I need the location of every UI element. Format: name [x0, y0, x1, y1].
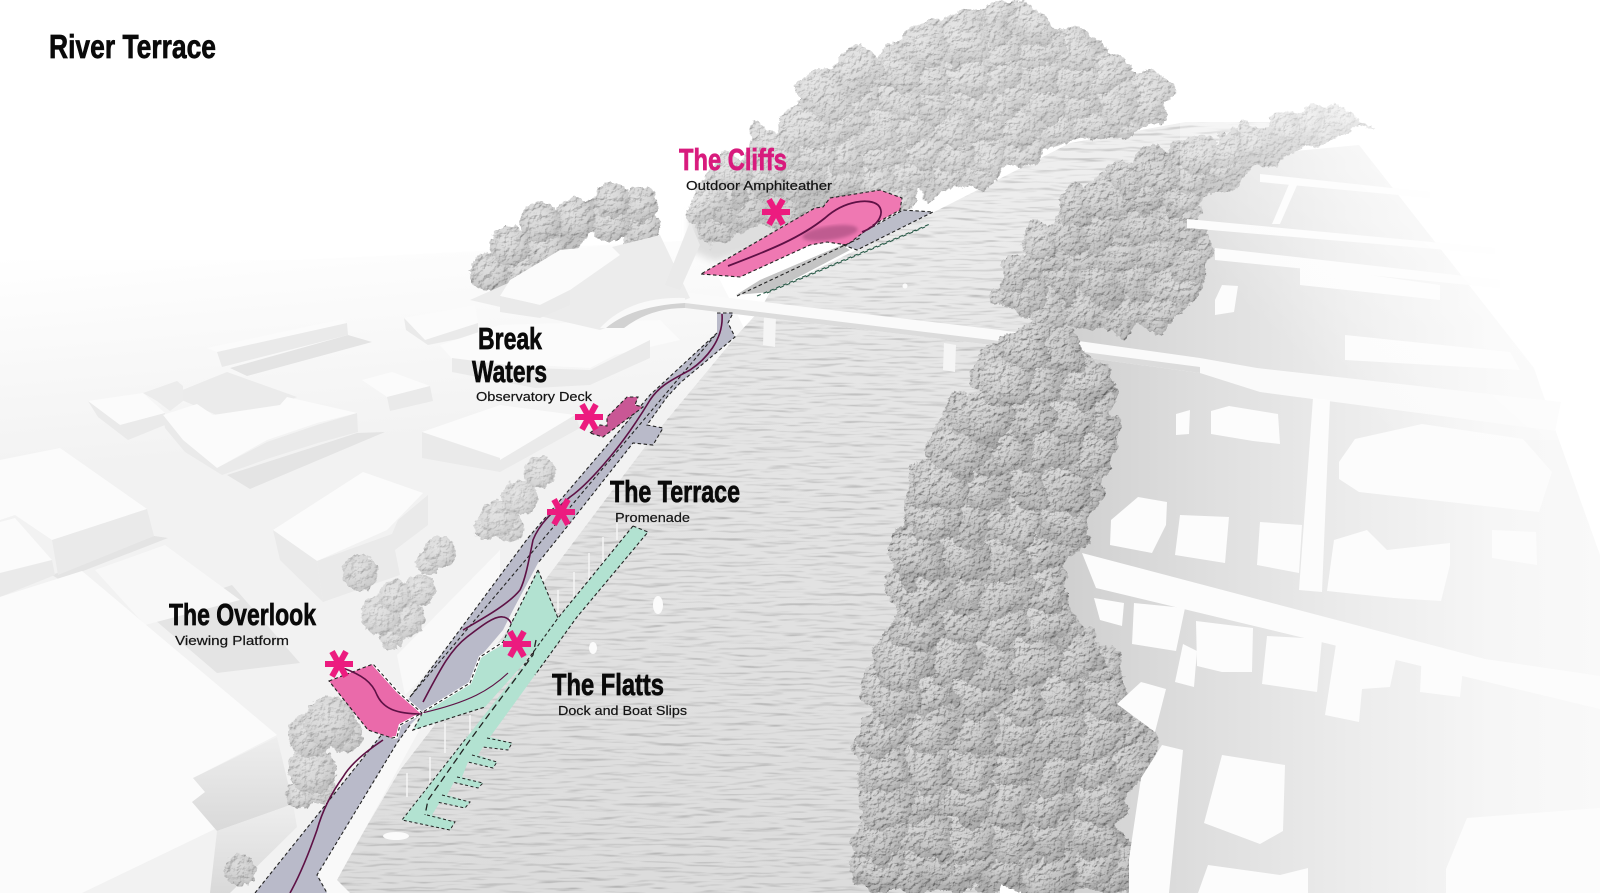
trees: small street trees: [342, 456, 556, 650]
promenade path line: [290, 314, 722, 893]
heading: break waters: Waters: [472, 354, 547, 389]
river bank white edge: [317, 718, 426, 893]
right neighbourhood buildings: [1110, 265, 1600, 893]
heading: the terrace: [610, 474, 740, 525]
riverside buildings overlapping trees: [1094, 598, 1183, 893]
subheading: promenade: Promenade: [615, 510, 690, 525]
background: left neighbourhood ground: [0, 240, 745, 893]
heading: the flatts: The Flatts: [552, 667, 664, 702]
title: River Terrace: [49, 28, 216, 65]
heading: break waters: Break: [478, 321, 543, 356]
icon: asterisk overlook: [325, 652, 353, 676]
trees: main bank beside river: [848, 317, 1156, 893]
heading: the overlook: [169, 597, 317, 648]
heading: the flatts: [552, 667, 688, 718]
left neighbourhood buildings: [0, 222, 700, 893]
river water: [327, 122, 1290, 893]
trees: hillside above the cliffs: [688, 2, 1168, 250]
heading: the terrace: The Terrace: [610, 474, 740, 509]
bridge: [680, 292, 1561, 431]
subheading: outdoor amphitheater: Outdoor Amphiteather: [686, 178, 833, 193]
left neighbourhood shadows: [52, 335, 385, 673]
heading: break waters: [472, 321, 593, 404]
subheading: observatory deck: Observatory Deck: [476, 389, 593, 404]
boat slip fingers: [402, 640, 536, 830]
icon: asterisk break waters: [575, 404, 603, 430]
panel: the flatts dock and boat slips: [402, 526, 648, 830]
icon: asterisk cliffs: [762, 200, 790, 224]
panel: the terrace promenade: [255, 313, 735, 893]
heading: the cliffs: The Cliffs: [679, 142, 787, 177]
trees: lower left by promenade: [224, 696, 363, 886]
trees: misty canopy behind cliffs: [690, 170, 880, 262]
panel: the cliffs amphitheatre: [701, 190, 933, 296]
boats on water: [383, 284, 908, 840]
panel: break waters observatory deck: [590, 397, 643, 437]
icon: asterisk terrace: [547, 500, 575, 524]
subheading: dock and boat slips: Dock and Boat Slips: [558, 703, 688, 718]
right fade: [1180, 60, 1600, 440]
retaining wall beside promenade: [397, 550, 500, 695]
panel: the overlook platform: [329, 664, 422, 738]
subheading: viewing platform: Viewing Platform: [175, 633, 289, 648]
right neighbourhood roads: [1082, 174, 1600, 709]
icon: asterisk flatts: [503, 632, 531, 656]
trees: left of amphitheatre: [470, 182, 660, 296]
heading: the overlook: The Overlook: [169, 597, 317, 632]
trees: far bank strip: [991, 108, 1375, 332]
background: right neighbourhood ground: [1000, 145, 1600, 893]
boat masts in water: [407, 520, 617, 797]
heading: the cliffs: [679, 142, 833, 193]
